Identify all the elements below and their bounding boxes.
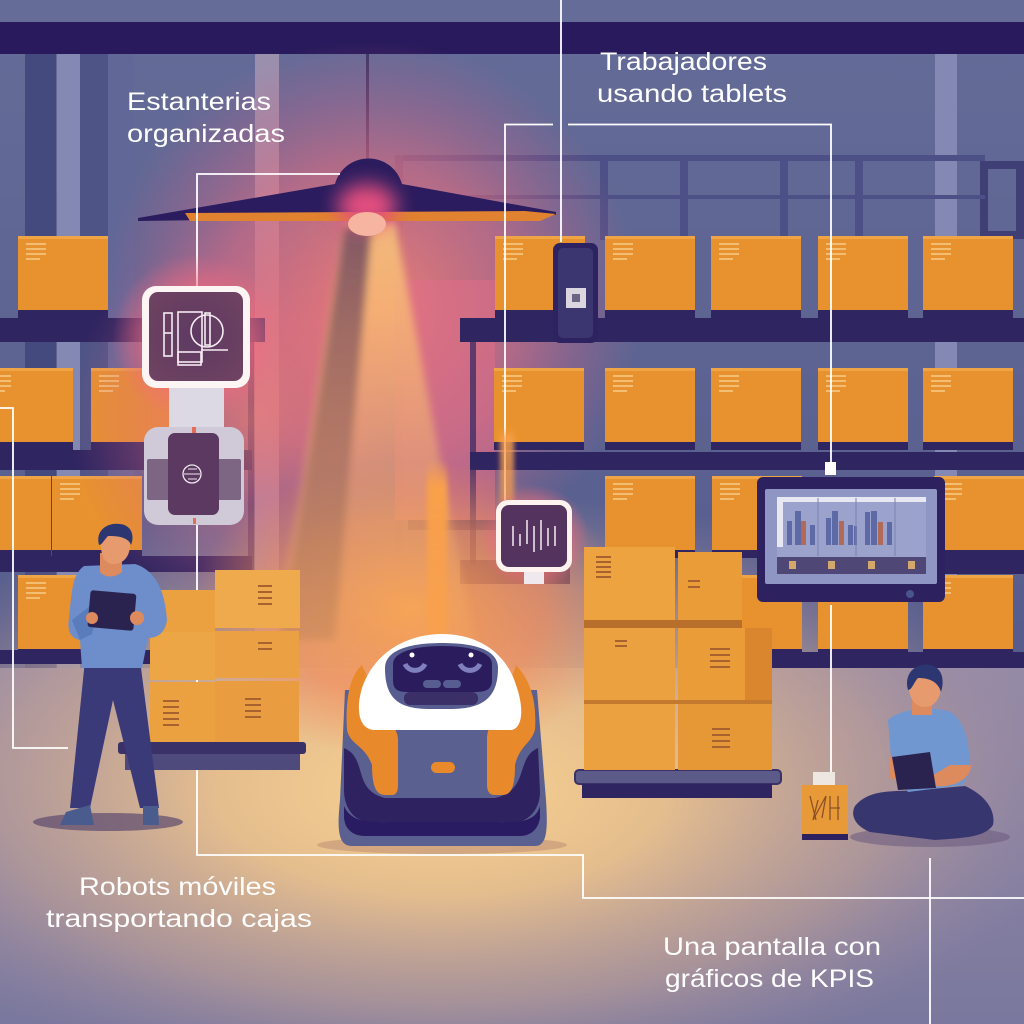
lamp cable: [366, 54, 369, 164]
label: shelves: Estanterias: [127, 88, 271, 116]
right pallet stack of boxes: [575, 547, 781, 798]
warm wash over shelves near the lamp: [70, 220, 430, 620]
shelf boxes second row: [0, 368, 1013, 450]
background wall: [0, 0, 1024, 680]
mobile robot: [317, 634, 567, 854]
label: shelves: organizadas: [127, 120, 285, 148]
bar chart: [787, 498, 895, 556]
label: KPI screen: Una pantalla con: [663, 933, 881, 961]
icon: waveform screen: [479, 485, 589, 589]
shelves: dark rails and uprights: [0, 318, 1024, 668]
ceiling beam: [0, 22, 1024, 54]
ceiling lamp: [138, 158, 556, 236]
icon: wall scanner unit: [144, 427, 244, 525]
light cone: [270, 222, 480, 670]
label: shelves: [127, 88, 285, 148]
line connector tab: [825, 462, 836, 475]
label: mobile robots: transportando cajas: [46, 905, 312, 933]
label: tablet workers: usando tablets: [597, 80, 787, 108]
label: tablet workers: [597, 48, 787, 108]
worker standing with tablet: [33, 524, 183, 831]
small labelled box: [802, 772, 848, 840]
label: mobile robots: [46, 873, 312, 933]
pink back panel: [395, 280, 495, 520]
shelf boxes fourth row: [18, 575, 1013, 657]
shelf scanner device: [553, 243, 598, 343]
label: tablet workers: Trabajadores: [600, 48, 767, 76]
KPI monitor: [757, 477, 945, 602]
orange light beams: [427, 428, 514, 645]
background columns: [25, 54, 1020, 674]
central glow: [100, 40, 640, 580]
shelf boxes top row: [18, 236, 1013, 318]
icon: blueprint screen: [112, 254, 280, 422]
left pallet stack of boxes: [118, 570, 306, 770]
label: KPI screen: gráficos de KPIS: [665, 965, 874, 993]
label: KPI screen: [663, 933, 881, 993]
worker sitting with tablet: [850, 664, 1010, 847]
floor: [0, 490, 1024, 1024]
scanner neck: [169, 388, 224, 428]
shelf boxes third row: [0, 476, 1024, 558]
label: mobile robots: Robots móviles: [79, 873, 276, 901]
